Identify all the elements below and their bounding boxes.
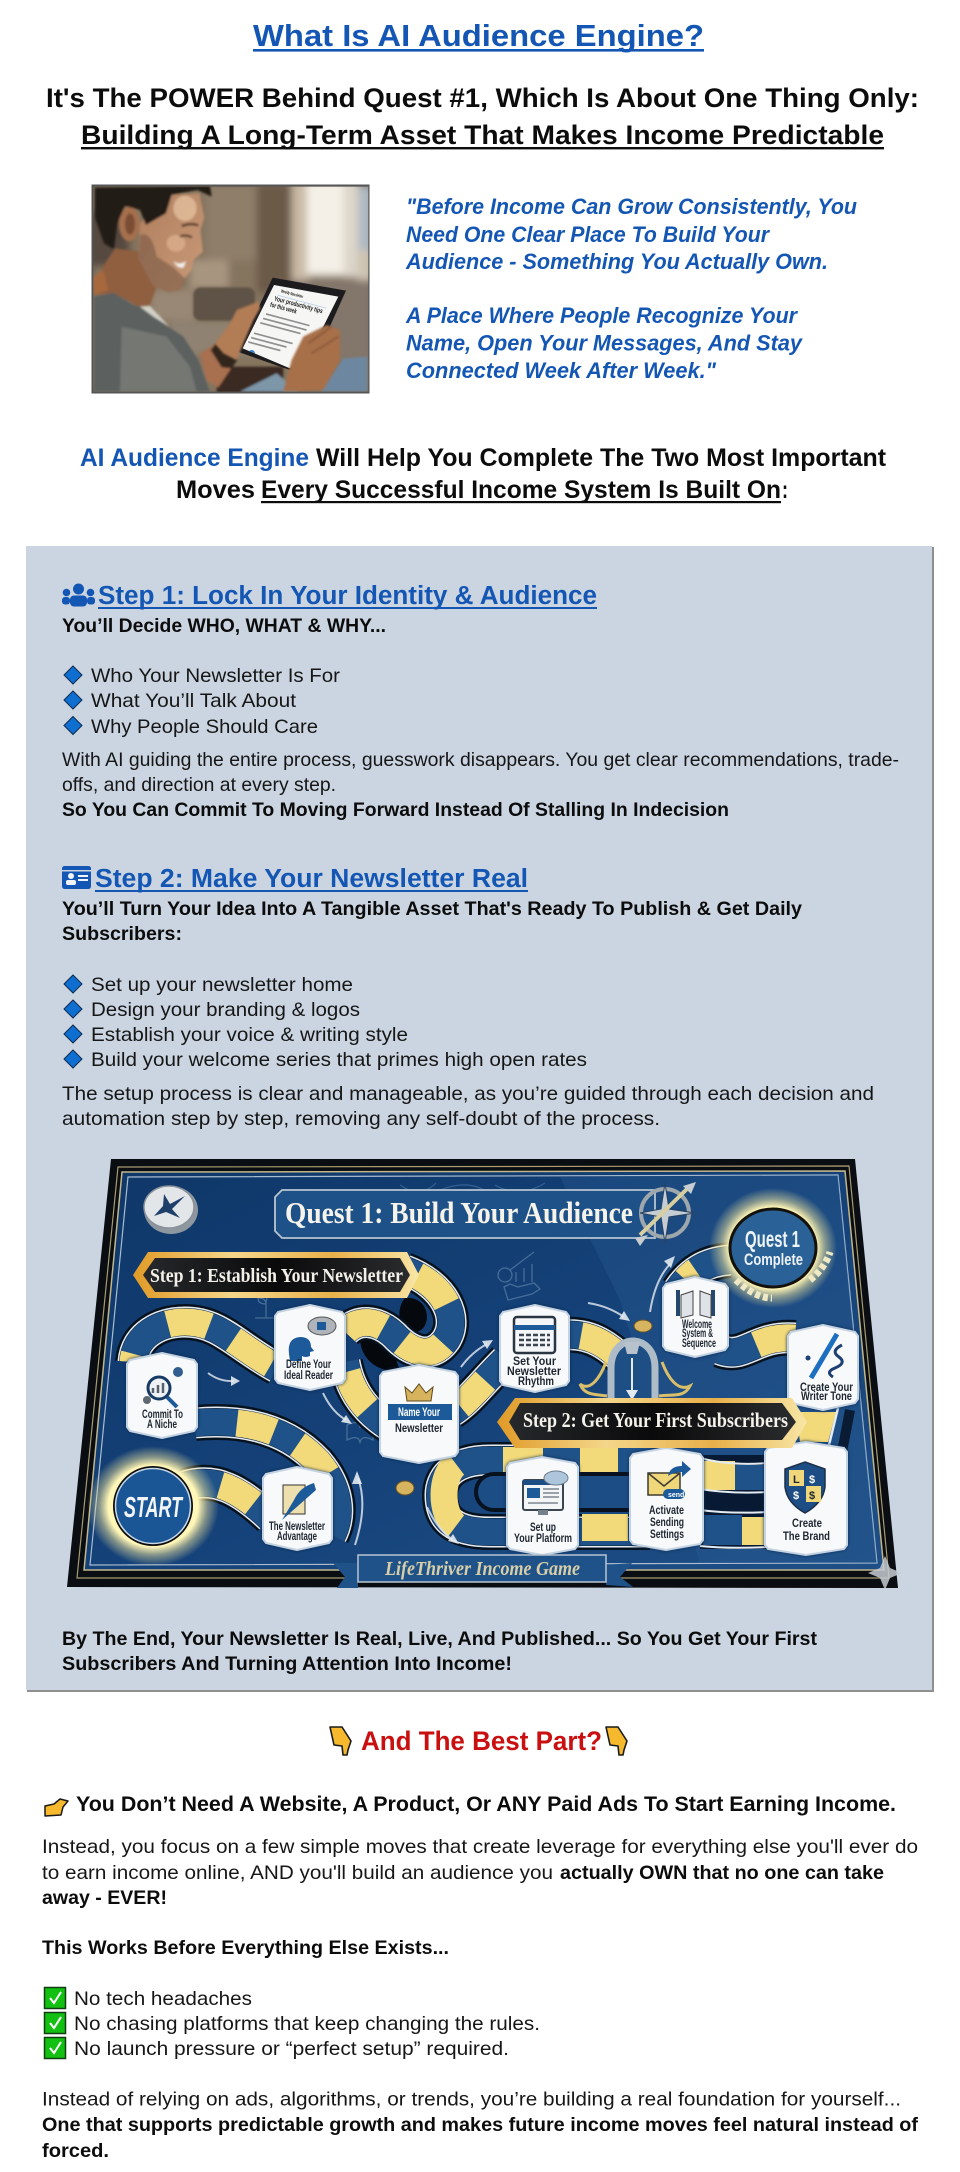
card: the newsletter advantage: Advantage [277,1531,317,1543]
closing paragraph: Instead of relying on ads, algorithms, or trends, you’re building a real foundation for yourself... [42,2088,901,2110]
intro heading: two moves: AI Audience Engine [80,444,309,472]
closing paragraph [42,2088,919,2162]
quote text [405,194,858,383]
photo: man reading newsletter on tablet [90,180,373,397]
step 1 banner: Step 1: Establish Your Newsletter [150,1265,403,1287]
filigree and dark hollows [360,1183,545,1372]
checklist: No chasing platforms that keep changing the rules. [74,2013,540,2035]
icon: pointing right hand [45,1799,68,1816]
instead paragraph [42,1836,918,1909]
card: set your newsletter rhythm: Newsletter [507,1366,561,1378]
track: niche to ideal reader [133,1322,277,1368]
step 2 paragraph [62,1083,874,1130]
card: set your newsletter rhythm: Rhythm [518,1376,554,1388]
track: welcome to complete [678,1260,730,1290]
card: activate sending settings [630,1448,703,1550]
compass rose [635,1182,696,1246]
card: activate sending settings: Activate [649,1505,684,1517]
step 2 subheading: Subscribers: [62,923,182,945]
card: define your ideal reader [275,1305,345,1390]
step 2 heading: Step 2: Make Your Newsletter Real [95,865,528,893]
step 2 bullet list [64,974,587,1071]
quest complete badge [709,1188,837,1308]
game board illustration [67,1159,902,1590]
quote text: Connected Week After Week." [406,358,717,383]
card: set your newsletter rhythm: Set Your [513,1356,556,1368]
subtitle heading [46,83,919,150]
step 2 paragraph: The setup process is clear and manageable, as you’re guided through each decision and [62,1083,874,1105]
step 1 paragraph: With AI guiding the entire process, guesswork disappears. You get clear recommendations, trade- [62,749,899,771]
start badge: START [124,1492,183,1524]
quote text: Need One Clear Place To Build Your [406,222,770,247]
instead paragraph: away - EVER! [42,1887,167,1909]
icon: pointing down right [606,1727,627,1755]
track: lower S to name card [345,1362,392,1428]
step 1 bullet list: What You’ll Talk About [91,690,297,712]
step 2 paragraph: automation step by step, removing any self-doubt of the process. [62,1108,660,1130]
track: start to newsletter advantage [185,1483,270,1518]
card: define your ideal reader: Ideal Reader [284,1370,333,1382]
step 1 subheading: You’ll Decide WHO, WHAT & WHY... [62,615,386,637]
card: create the brand: $ [809,1490,815,1502]
photo: man reading newsletter on tablet: Your productivity tips [273,296,324,315]
track rows right of activate card [700,1455,770,1549]
step 1 bullet list: Who Your Newsletter Is For [91,665,341,687]
card: welcome system [663,1277,728,1357]
arrows [208,1256,675,1545]
card: define your ideal reader: Define Your [286,1359,331,1371]
track: step 2 U loop [440,1447,650,1541]
card: activate sending settings: Settings [650,1529,684,1541]
title: What Is AI Audience Engine? [253,18,704,53]
quote text: Name, Open Your Messages, And Stay [406,330,804,356]
icon: pointing down left [330,1727,351,1755]
card: activate sending settings: send [668,1492,684,1499]
watermark star [868,1556,902,1590]
card: create your writer tone: Create Your [800,1382,853,1394]
card: name your newsletter: Newsletter [395,1423,443,1435]
card: create the brand: $ [793,1490,799,1502]
icon: id card [62,866,91,889]
card: create the brand [765,1442,847,1555]
card: create your writer tone: Writer Tone [801,1391,852,1403]
photo: man reading newsletter on tablet: for this week [269,302,298,316]
card: activate sending settings: Sending [650,1517,684,1529]
title banner [275,1190,655,1238]
intro heading: two moves [80,444,887,504]
no website heading: You Don’t Need A Website, A Product, Or ANY Paid Ads To Start Earning Income. [76,1793,896,1816]
photo: man reading newsletter on tablet: Weekly Newsletter [281,288,304,299]
panel: steps [26,546,934,1692]
start badge [87,1446,219,1566]
instead paragraph: to earn income online, AND you'll build an audience you [42,1862,553,1884]
icon: users [62,584,95,606]
checklist [44,1988,540,2060]
intro heading: two moves: Will Help You Complete The Two Most Important [316,444,887,472]
subtitle heading: It's The POWER Behind Quest #1, Which Is About One Thing Only: [46,83,919,113]
card: set your newsletter rhythm [500,1305,569,1392]
step 1 paragraph [62,749,899,821]
card: set up your platform [507,1457,578,1555]
card: name your newsletter [380,1365,458,1463]
step 2 bullet list: Design your branding & logos [91,999,360,1021]
closing paragraph: forced. [42,2140,109,2162]
track: rhythm to arch [565,1335,630,1368]
card: welcome system: Welcome [682,1319,712,1331]
track: advantage to niche [195,1422,338,1535]
step 1 paragraph: So You Can Commit To Moving Forward Instead Of Stalling In Indecision [62,799,729,821]
track: name to rhythm [452,1360,505,1412]
card: create the brand: $ [809,1474,815,1486]
card: set up your platform: Your Platform [514,1533,572,1545]
step 1 banner [133,1252,419,1298]
track: S curve [345,1270,451,1352]
track near writer card [796,1408,850,1452]
decorative faint icons [255,1252,541,1444]
closing statement: Subscribers And Turning Attention Into Income! [62,1653,512,1675]
step 1 bullet list [64,665,341,738]
card: welcome system: Sequence [682,1338,716,1350]
step 2 banner [497,1398,807,1448]
card: set up your platform: Set up [530,1522,556,1534]
intro heading: two moves: Moves [176,476,255,504]
checklist: No tech headaches [74,1988,252,2010]
intro heading: two moves: Every Successful Income System Is Built On [261,476,781,504]
instead paragraph: actually OWN that no one can take [560,1862,884,1884]
step 2 subheading [62,898,802,945]
quote text: Audience - Something You Actually Own. [405,249,828,274]
board frame [67,1159,898,1588]
track: welcome to writer tone [720,1338,795,1352]
closing paragraph: One that supports predictable growth and makes future income moves feel natural instead of [42,2114,919,2136]
card: the newsletter advantage [263,1467,332,1550]
works before heading: This Works Before Everything Else Exists... [42,1937,449,1959]
step 2 bullet list: Build your welcome series that primes high open rates [91,1049,587,1071]
compass left [144,1186,198,1234]
step 2 bullet list: Set up your newsletter home [91,974,353,996]
checklist: No launch pressure or “perfect setup” required. [74,2038,509,2060]
closing statement [62,1628,818,1675]
step 2 banner: Step 2: Get Your First Subscribers [523,1408,788,1432]
intro heading: two moves: : [782,476,788,504]
card: create the brand: The Brand [783,1531,830,1543]
step 1 paragraph: offs, and direction at every step. [62,774,336,796]
step 2 subheading: You’ll Turn Your Idea Into A Tangible Asset That's Ready To Publish & Get Daily [62,898,802,920]
card: the newsletter advantage: The Newsletter [269,1521,325,1533]
card: welcome system: System & [682,1328,713,1340]
best part heading: And The Best Part? [361,1726,602,1756]
coins [396,1320,652,1495]
subtitle heading: Building A Long-Term Asset That Makes Income Predictable [81,120,884,150]
quest complete badge: Complete [744,1250,803,1269]
step 1 bullet list: Why People Should Care [91,716,318,738]
card: create your writer tone [788,1325,858,1410]
bottom ribbon: LifeThriver Income Game [384,1558,580,1580]
card: create the brand: L [793,1474,800,1486]
card: commit to a niche: A Niche [147,1419,177,1431]
quote text: A Place Where People Recognize Your [405,303,798,328]
card: commit to a niche: Commit To [142,1409,183,1421]
title banner: Quest 1: Build Your Audience [285,1195,633,1230]
step 1 heading: Step 1: Lock In Your Identity & Audience [98,582,597,610]
step 2 bullet list: Establish your voice & writing style [91,1024,408,1046]
card: create the brand: Create [792,1518,822,1530]
closing statement: By The End, Your Newsletter Is Real, Live, And Published... So You Get Your First [62,1628,818,1650]
bottom ribbon [333,1555,633,1588]
silver arch [580,1341,690,1400]
quest complete badge: Quest 1 [745,1226,800,1252]
card: name your newsletter: Name Your [398,1405,440,1419]
instead paragraph: Instead, you focus on a few simple moves that create leverage for everything else you'll ever do [42,1836,918,1858]
quote text: "Before Income Can Grow Consistently, You [406,194,858,219]
card: commit to a niche [127,1353,197,1438]
